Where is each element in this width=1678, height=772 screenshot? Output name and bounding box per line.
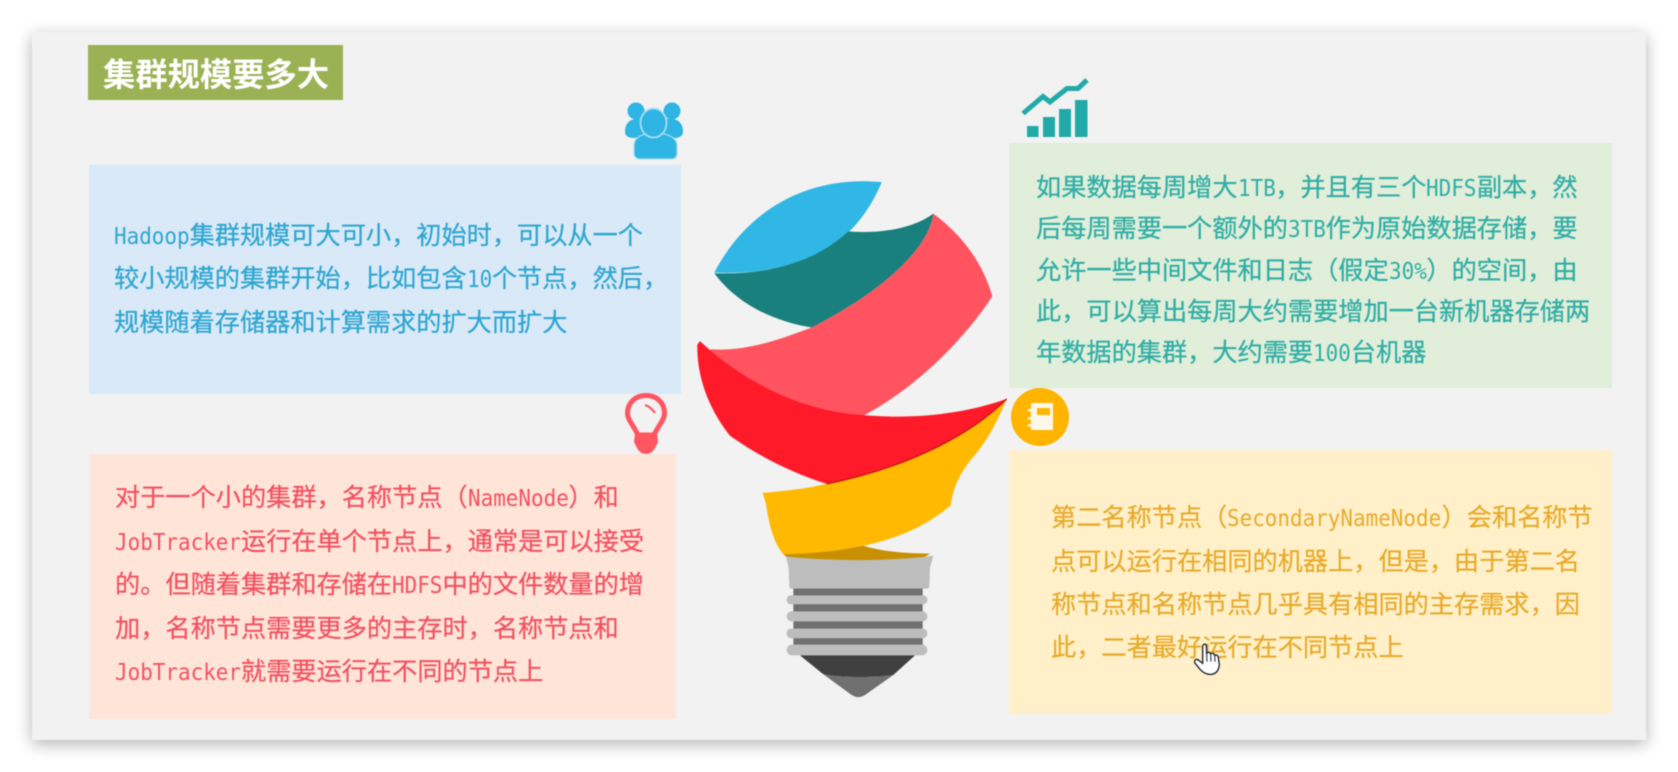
bulb ribbon: yellow bbox=[763, 399, 1007, 554]
text block: NameNode description: JobTracker bbox=[115, 530, 241, 556]
icon: light bulb outline bbox=[628, 396, 664, 454]
text block: SecondaryNameNode description: 第二名称节点（ ）会和名称节 bbox=[1051, 498, 1593, 534]
icon: people group bbox=[625, 102, 683, 159]
text block: storage growth description: 1TB bbox=[1238, 176, 1275, 202]
text block: storage growth description: 后每周需要一个额外的 作为原始数据存储，要 bbox=[1036, 209, 1578, 245]
text block: cluster size description bbox=[114, 216, 668, 339]
text block: cluster size description: 较小规模的集群开始，比如包含 个节点，然后， bbox=[114, 259, 668, 295]
icon: growth chart bbox=[1023, 80, 1088, 137]
icon: hand cursor bbox=[1195, 644, 1219, 674]
text block: NameNode description: NameNode bbox=[468, 486, 568, 512]
text block: SecondaryNameNode description bbox=[1051, 498, 1593, 664]
text block: storage growth description: 此，可以算出每周大约需要增加一台新机器存储两 bbox=[1036, 292, 1590, 328]
panel: cluster size (blue) bbox=[89, 165, 681, 394]
text block: NameNode description: 运行在单个节点上，通常是可以接受 bbox=[241, 522, 644, 558]
text block: NameNode description: HDFS bbox=[392, 573, 442, 599]
text block: cluster size description: 集群规模可大可小，初始时，可以从一个 bbox=[190, 216, 643, 252]
text block: NameNode description: 对于一个小的集群，名称节点（ ）和 bbox=[115, 478, 619, 514]
bulb ribbon: coral bbox=[710, 214, 992, 416]
text block: NameNode description: JobTracker bbox=[115, 660, 241, 686]
text block: NameNode description: 的。但随着集群和存储在 中的文件数量的增 bbox=[115, 565, 644, 601]
bulb ribbon: teal bbox=[714, 214, 933, 327]
text block: storage growth description: 30% bbox=[1389, 259, 1426, 285]
panel: storage growth (green) bbox=[1009, 143, 1612, 388]
text block: storage growth description: HDFS bbox=[1426, 176, 1477, 202]
bulb ribbon: blue bbox=[714, 181, 882, 273]
text block: storage growth description: 允许一些中间文件和日志（假定 ）的空间，由 bbox=[1036, 251, 1578, 287]
bulb neck shadow bbox=[783, 546, 930, 560]
panel: SecondaryNameNode (yellow) bbox=[1009, 450, 1612, 714]
text block: cluster size description: 10 bbox=[467, 267, 492, 293]
text block: storage growth description bbox=[1036, 168, 1590, 369]
light bulb illustration bbox=[697, 181, 1007, 697]
text block: storage growth description: 如果数据每周增大 ，并且有三个 副本，然 bbox=[1036, 168, 1578, 204]
text block: cluster size description: 规模随着存储器和计算需求的扩大而扩大 bbox=[114, 303, 567, 339]
panel: NameNode and JobTracker (red) bbox=[89, 454, 676, 719]
text block: storage growth description: 年数据的集群，大约需要 台机器 bbox=[1036, 333, 1426, 369]
title: 集群规模要多大 bbox=[103, 50, 329, 96]
text block: cluster size description: Hadoop bbox=[114, 224, 190, 250]
icon: notebook badge bbox=[1011, 388, 1069, 446]
text block: NameNode description: 就需要运行在不同的节点上 bbox=[241, 652, 543, 688]
text block: storage growth description: 100 bbox=[1313, 341, 1351, 367]
text block: SecondaryNameNode description: 称节点和名称节点几乎具有相同的主存需求，因 bbox=[1051, 585, 1580, 621]
text block: SecondaryNameNode description: 此，二者最好运行在不同节点上 bbox=[1051, 628, 1404, 664]
text block: SecondaryNameNode description: 点可以运行在相同的机器上，但是，由于第二名 bbox=[1051, 542, 1580, 578]
text block: SecondaryNameNode description: SecondaryNameNode bbox=[1227, 506, 1442, 532]
text block: NameNode description bbox=[115, 478, 644, 688]
text block: storage growth description: 3TB bbox=[1288, 217, 1326, 243]
bulb ribbon: red bbox=[697, 341, 1007, 484]
bulb screw base bbox=[786, 556, 933, 697]
text block: NameNode description: 加，名称节点需要更多的主存时，名称节点和 bbox=[115, 609, 619, 645]
